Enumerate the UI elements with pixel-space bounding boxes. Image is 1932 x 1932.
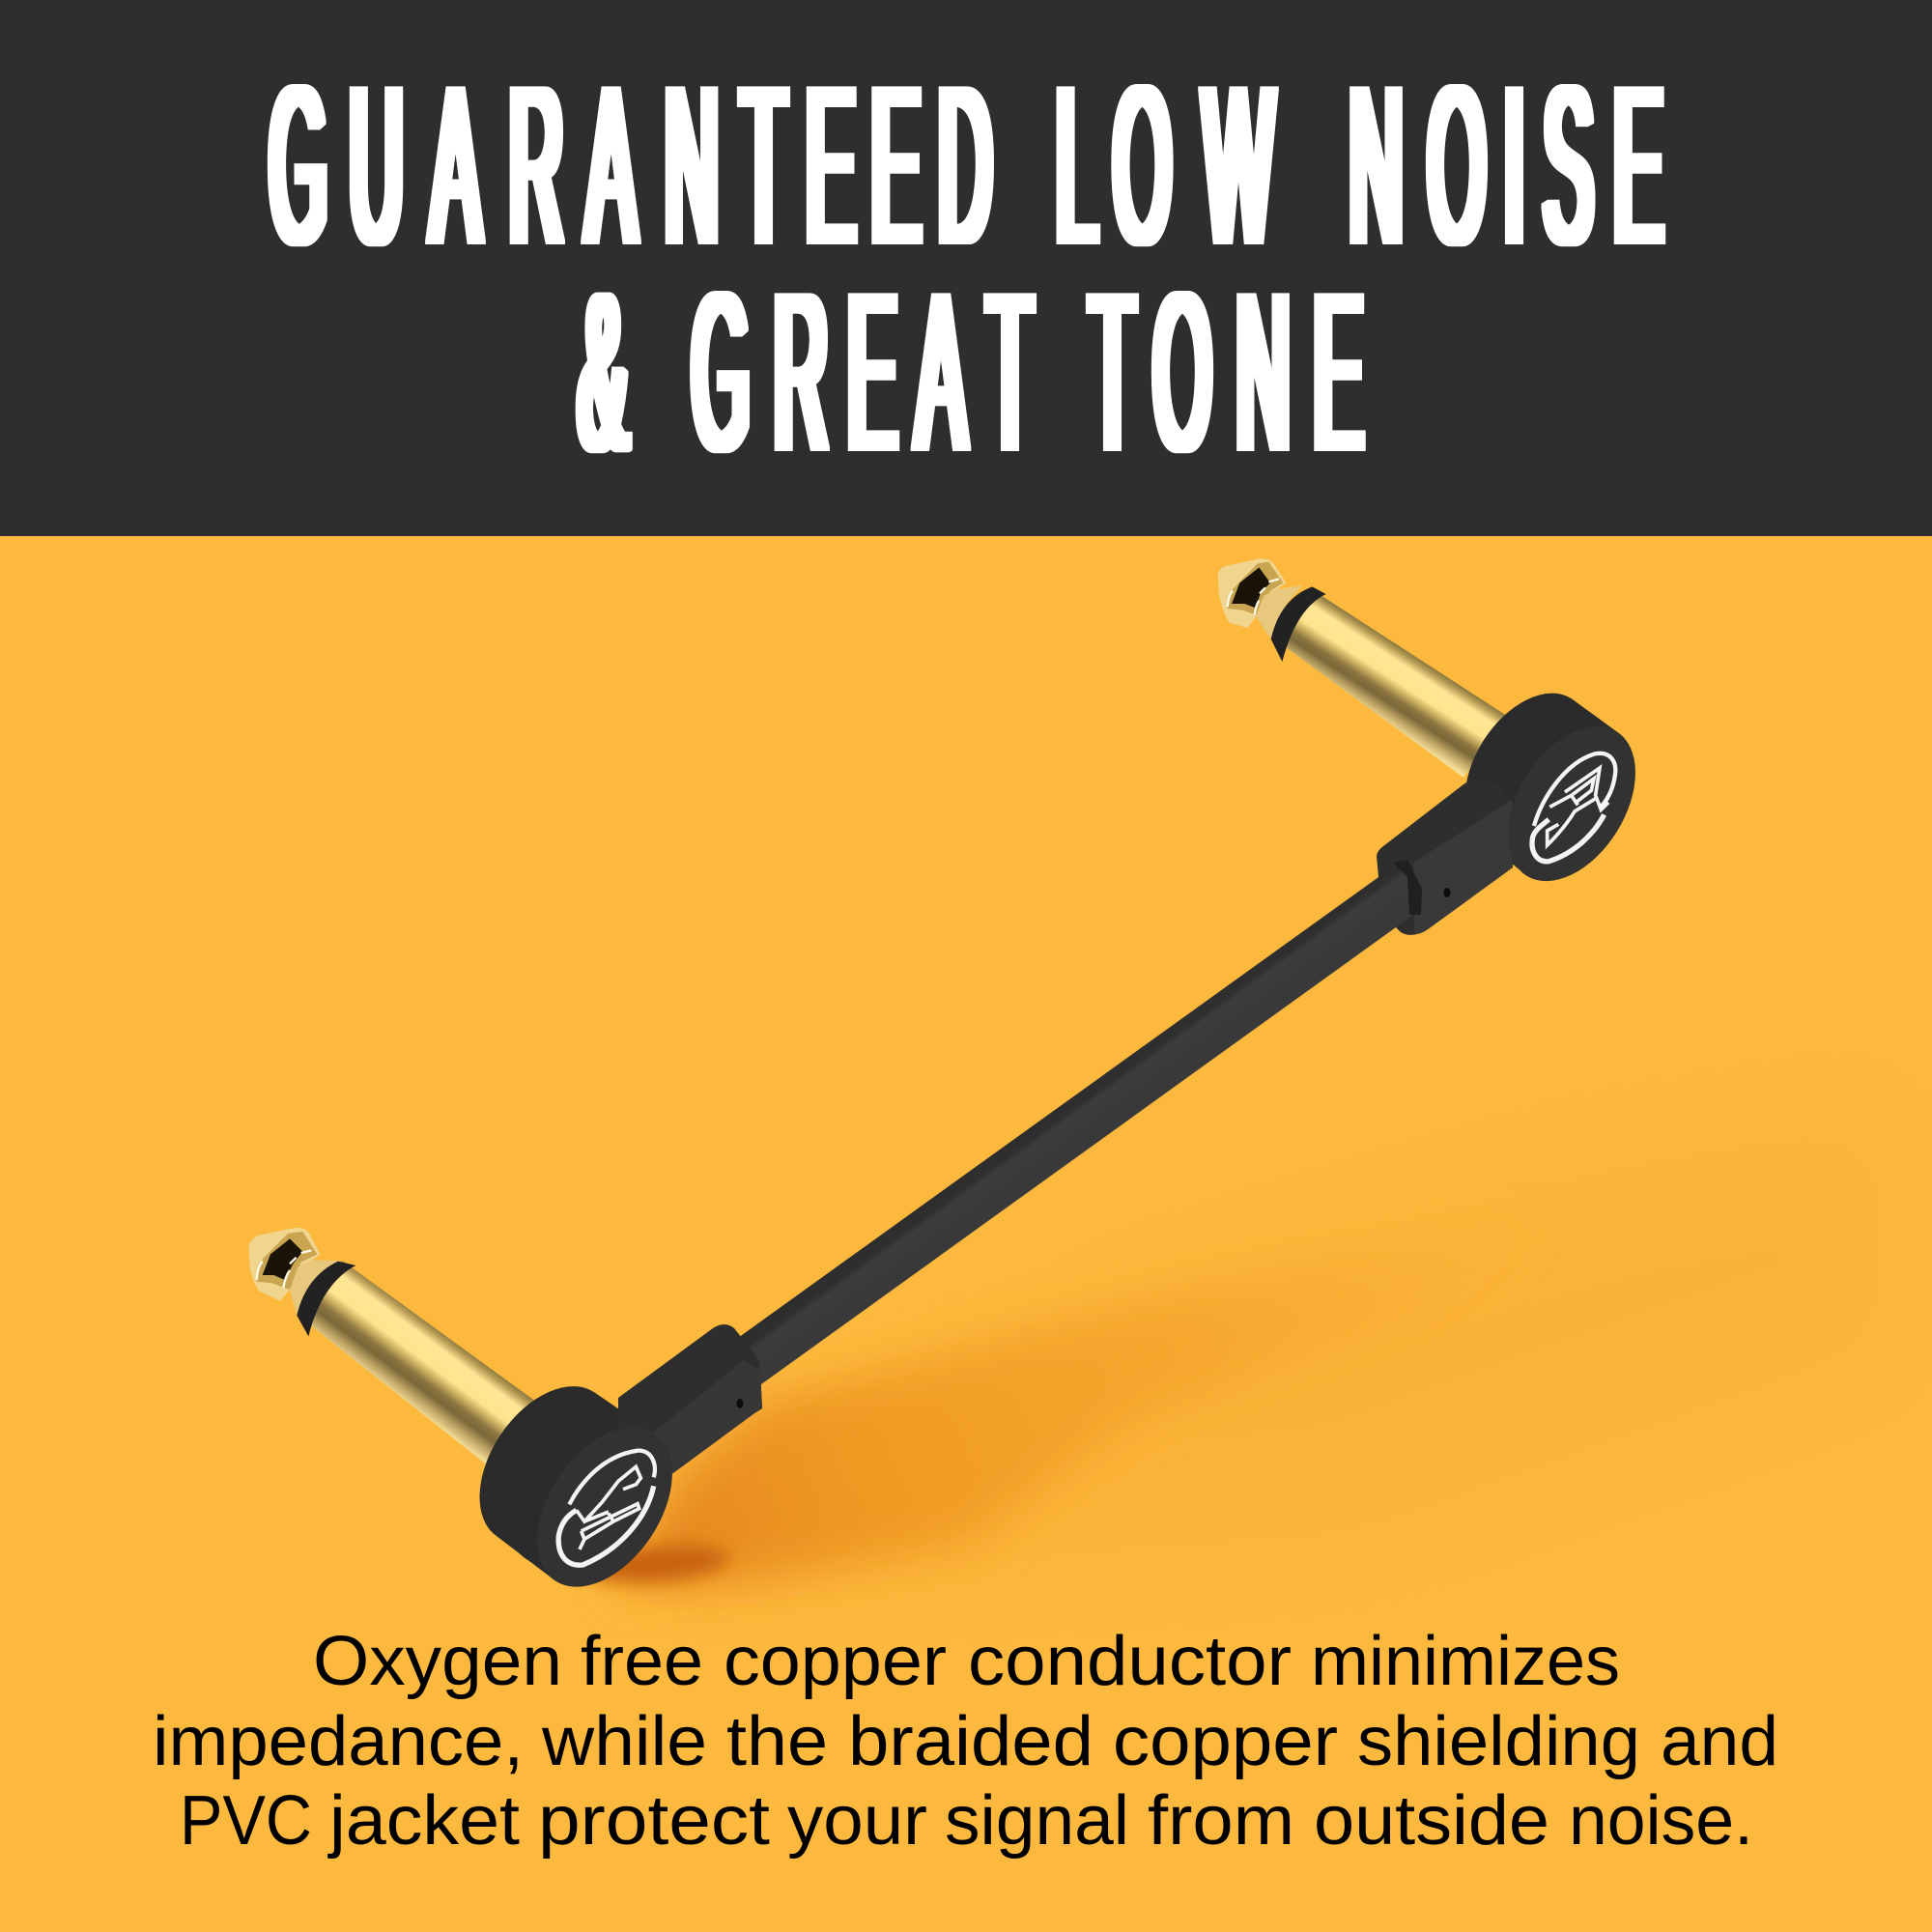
header band [0, 0, 1932, 536]
description text [153, 1623, 1778, 1860]
lower tip gold rim [256, 1232, 317, 1290]
lower connector housing [452, 1324, 762, 1611]
description line 2: and [1661, 1703, 1778, 1780]
upper disc side [1483, 698, 1617, 876]
lower tip dark core [263, 1238, 302, 1280]
upper plug neck [1256, 585, 1302, 639]
lower tip pale cone [248, 1228, 321, 1301]
description line 1: copper [724, 1623, 947, 1700]
lower logo ring bottom [558, 1486, 654, 1565]
lower block lit side [633, 1360, 762, 1478]
lower disc side [497, 1392, 654, 1580]
description line 3: from [1148, 1782, 1294, 1860]
lower plug tip [248, 1228, 355, 1336]
upper block lit side [1413, 800, 1513, 933]
upper screw hole [1443, 888, 1451, 897]
description line 1: conductor [968, 1623, 1292, 1700]
upper tip gold rim [1227, 562, 1283, 616]
description line 1: Oxygen [313, 1623, 562, 1700]
description line 1: minimizes [1311, 1623, 1620, 1700]
upper plug shaft [1270, 588, 1505, 778]
upper disc face [1482, 703, 1662, 904]
description line 3: jacket [327, 1782, 520, 1860]
title: GUARANTEED LOW NOISE [270, 40, 1663, 291]
lower logo monogram [577, 1466, 640, 1549]
upper tip highlights [1228, 579, 1279, 615]
lower disc face [509, 1403, 700, 1611]
lower tip highlights [257, 1250, 311, 1288]
upper plug ring [1271, 586, 1326, 662]
upper connector housing [1377, 670, 1662, 935]
lower strain relief block [618, 1324, 762, 1478]
lower plug ring [297, 1262, 355, 1336]
upper tip pale cone [1218, 558, 1287, 628]
upper strain relief block [1377, 780, 1513, 935]
lower logo ring top [569, 1451, 655, 1504]
cable entry slot [1393, 860, 1422, 915]
description line 2: while [541, 1703, 707, 1780]
lower logo [558, 1451, 655, 1565]
description line 2: shielding [1357, 1703, 1640, 1780]
description line 3: your [787, 1782, 927, 1860]
upper tip dark core [1232, 567, 1270, 608]
flat cable [724, 860, 1420, 1397]
description line 3: noise. [1569, 1782, 1753, 1860]
description line 2: impedance, [153, 1703, 524, 1780]
cast shadow [583, 1111, 1893, 1594]
description line 3: PVC [180, 1782, 312, 1860]
description line 2: copper [1113, 1703, 1338, 1780]
upper plug tip [1218, 558, 1326, 662]
description line 3: protect [538, 1782, 770, 1860]
title: & GREAT TONE [579, 246, 1363, 497]
description line 1: free [581, 1623, 703, 1700]
description line 2: braided [848, 1703, 1094, 1780]
upper logo [1532, 753, 1615, 862]
lower plug neck [290, 1260, 340, 1316]
upper logo ring bottom [1532, 814, 1605, 862]
description line 3: signal [945, 1782, 1129, 1860]
title [270, 40, 1663, 497]
lower plug shaft [298, 1261, 538, 1469]
description line 3: outside [1314, 1782, 1549, 1860]
description line 2: the [726, 1703, 828, 1780]
upper logo monogram [1548, 768, 1608, 845]
upper logo ring top [1534, 753, 1615, 826]
lower screw hole [736, 1399, 744, 1408]
